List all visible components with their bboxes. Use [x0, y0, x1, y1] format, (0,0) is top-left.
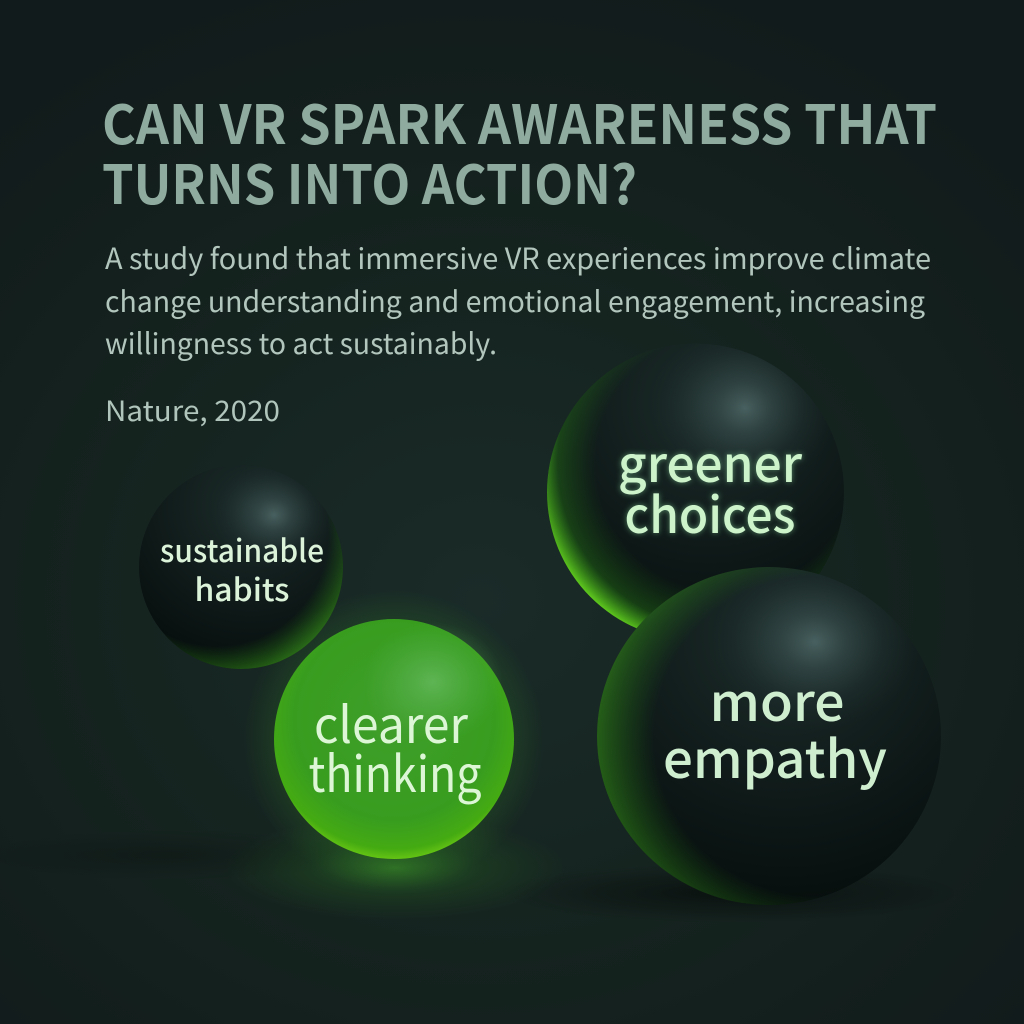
- sphere: sustainable habits: habits: [194, 565, 290, 610]
- floor shadow: [0, 829, 960, 923]
- sphere: clearer thinking: thinking: [308, 735, 482, 807]
- sphere: greener choices: choices: [624, 476, 796, 548]
- description text: [105, 236, 931, 363]
- sphere: greener choices: greener: [618, 425, 803, 497]
- sphere: sustainable habits: sustainable: [160, 526, 324, 571]
- description text: change understanding and emotional engagement, increasing: [105, 279, 925, 321]
- sphere: more empathy: more: [710, 661, 844, 736]
- sphere: greener choices: [547, 346, 844, 628]
- description text: A study found that immersive VR experiences improve climate: [105, 236, 931, 278]
- title: TURNS INTO ACTION?: [102, 141, 637, 220]
- sphere: more empathy: empathy: [663, 718, 887, 793]
- sphere: more empathy: [597, 554, 941, 905]
- description text: willingness to act sustainably.: [105, 321, 497, 363]
- title: CAN VR SPARK AWARENESS THAT: [102, 81, 937, 160]
- floor glow: [225, 816, 565, 920]
- sphere: clearer thinking: [244, 589, 544, 889]
- sphere: sustainable habits: [139, 461, 343, 669]
- title: [102, 81, 937, 220]
- sphere: clearer thinking: clearer: [314, 686, 469, 758]
- source citation: Nature, 2020: [105, 390, 280, 430]
